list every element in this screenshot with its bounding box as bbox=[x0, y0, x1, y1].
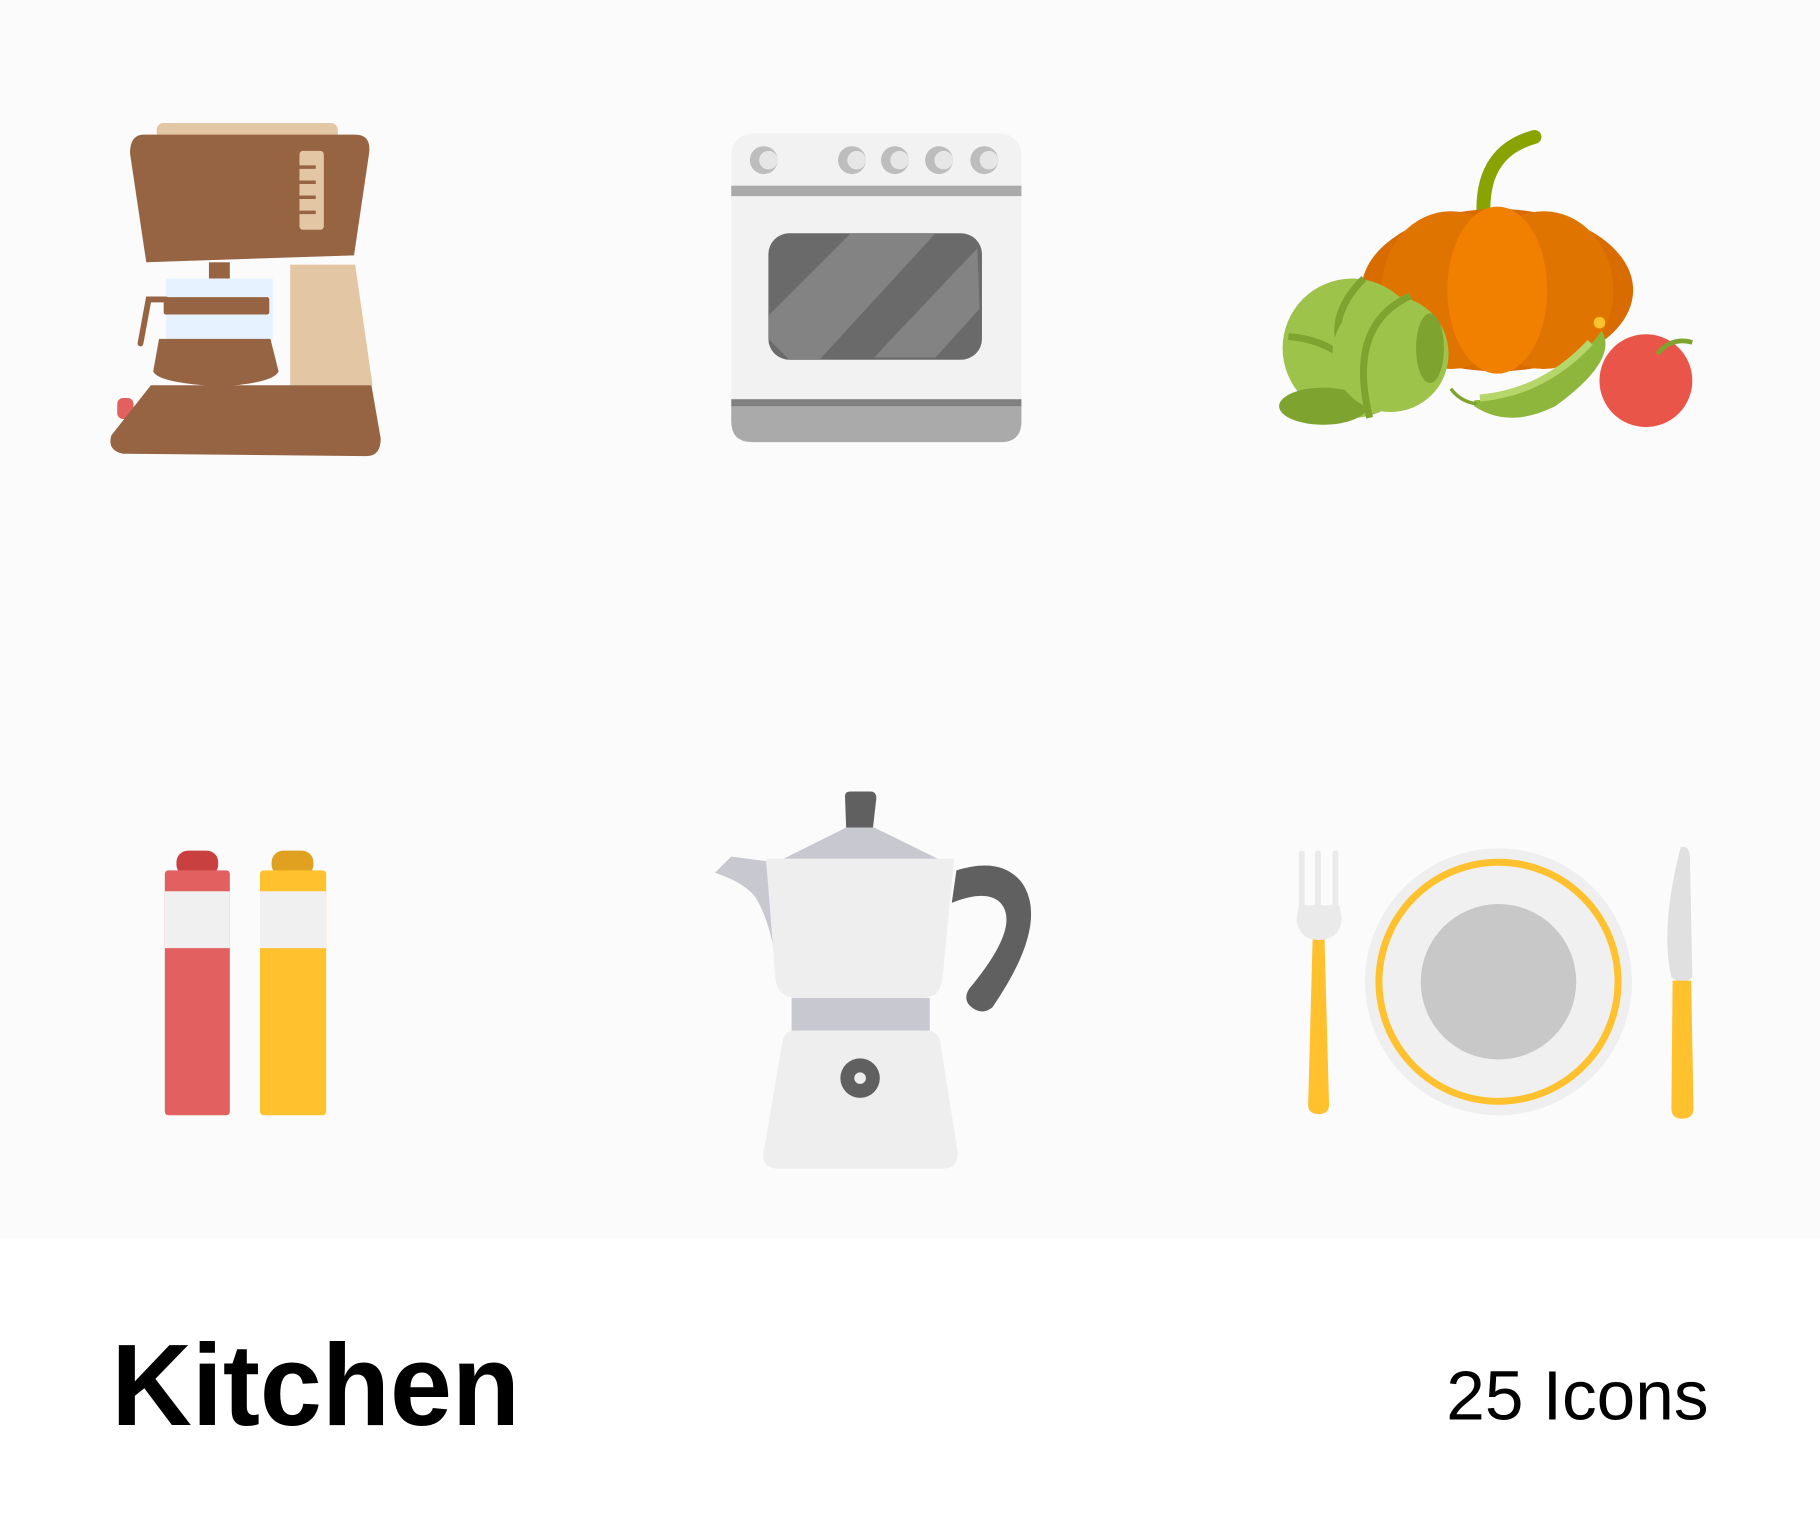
icon: vegetables bbox=[1279, 137, 1692, 427]
icon: salt and pepper shakers bbox=[165, 851, 326, 1115]
icon: oven bbox=[731, 133, 1021, 442]
icon: plate with fork and knife bbox=[1297, 847, 1693, 1119]
icon: moka pot bbox=[715, 791, 1031, 1169]
title: Kitchen bbox=[111, 1320, 520, 1450]
icon count: 25 Icons bbox=[1446, 1356, 1709, 1434]
icon: coffee maker bbox=[110, 123, 381, 456]
